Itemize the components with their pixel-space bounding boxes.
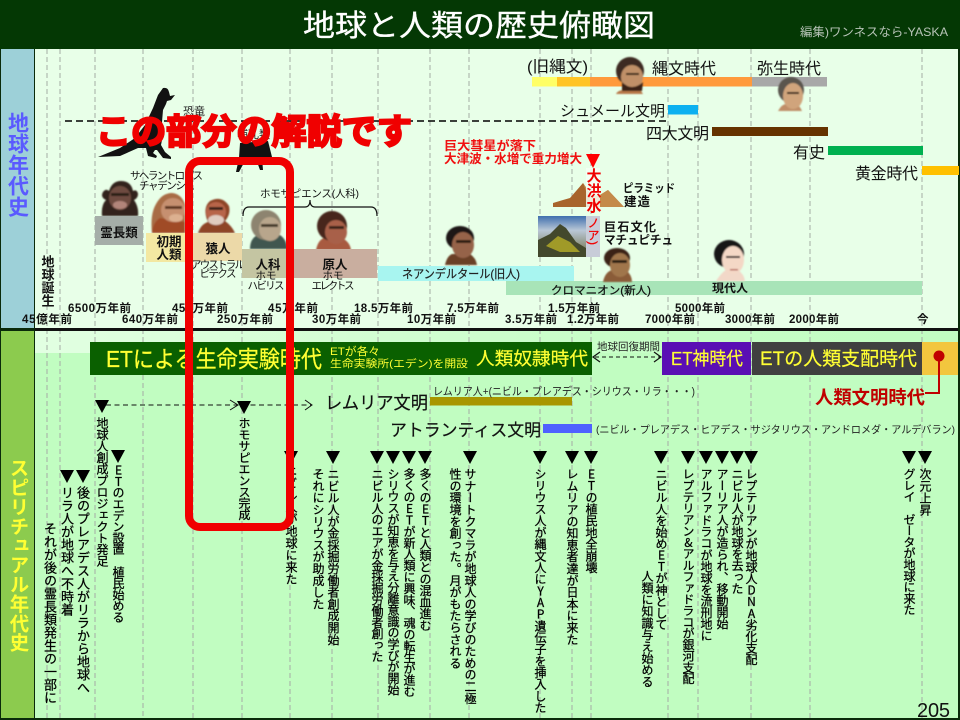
homo sapiens family label: ホモサピエンス(人科) <box>260 187 359 200</box>
event: Eden <box>110 450 127 622</box>
editor credit: 編集)ワンネスなら-YASKA <box>800 24 948 39</box>
text: ホモサピエンス完成 <box>236 417 253 520</box>
sidebar: spiritual age: スピリチュアル年代史 <box>6 458 29 652</box>
event: Sirius wisdom <box>385 451 402 696</box>
event: many ET interest <box>401 451 418 697</box>
lemuria label and bar: レムリア人+(ニビル・プレアデス・シリウス・リラ・・・) <box>433 384 695 398</box>
jomon labels <box>527 58 821 78</box>
recorded history label and bar: 有史 <box>793 144 825 162</box>
megalith label: 巨石文化 <box>604 219 656 234</box>
megalith label <box>604 219 673 247</box>
box: ape-man: アウストラル <box>191 259 245 271</box>
portrait: jomon man <box>616 57 644 94</box>
panel: spiritual age background <box>35 331 958 718</box>
portrait: early hominid <box>152 193 185 233</box>
event: ET colonies collapse <box>583 451 600 574</box>
jomon labels: 弥生時代 <box>757 60 821 78</box>
box: ape-man <box>191 233 245 280</box>
jomon labels: (旧縄文) <box>527 58 588 76</box>
event: earth human project <box>94 400 111 567</box>
text: それにシリウスが助成した <box>310 468 327 610</box>
era band: ET life experiment and slavery: 生命実験所(エデン)を開設 <box>330 357 469 370</box>
cro-magnon bar <box>506 281 922 297</box>
event: Aryans <box>714 451 731 630</box>
box: early hominids <box>146 233 193 262</box>
year labels: 30万年前 <box>312 312 361 326</box>
text: ニビル人のエアが金採掘労働者創った <box>369 468 386 662</box>
event: Nibiru arrive <box>283 451 300 585</box>
event: Grey Zeta <box>901 451 918 615</box>
event: Enki creates workers <box>369 451 386 662</box>
text: シリウスが知恵を与え分離意識の学びが開始 <box>385 468 402 695</box>
year labels: 今 <box>917 312 929 326</box>
year labels <box>22 301 929 326</box>
sumer label and bar: シュメール文明 <box>560 103 665 120</box>
box: homo erectus: エレクトス <box>312 280 354 292</box>
event: homo sapiens complete <box>236 401 253 520</box>
atlantis label and bar: アトランティス文明 <box>390 421 541 440</box>
recovery period arrow: 地球回復期間 <box>597 340 660 353</box>
portrait: homo erectus <box>316 211 351 250</box>
text: レプテリアンが地球人DNA劣化支配 <box>743 468 760 665</box>
icon: dinosaur silhouette <box>98 88 175 159</box>
year labels: 250万年前 <box>217 312 273 326</box>
comet note: 巨大彗星が落下 <box>444 138 536 153</box>
sidebar: spiritual age <box>1 331 34 718</box>
megalith label: マチュピチュ <box>604 233 673 247</box>
era band: ET life experiment and slavery <box>90 342 592 375</box>
pyramid label: 建造 <box>624 194 650 209</box>
brace: homo sapiens <box>243 200 377 216</box>
text: ETのエデン設置 植民始める <box>110 464 127 622</box>
era band: ET life experiment and slavery: 人類奴隷時代 <box>476 349 588 369</box>
sidebar: earth age: 地球年代史 <box>6 112 29 217</box>
year labels: 7.5万年前 <box>447 301 499 315</box>
year labels: 5000年前 <box>675 301 725 315</box>
birth of earth label: 地球誕生 <box>40 254 54 307</box>
lemuria label and bar: レムリア文明 <box>325 393 428 413</box>
year labels: 10万年前 <box>407 312 456 326</box>
portrait: chimp <box>102 181 138 216</box>
text: グレイ ゼータが地球に来た <box>901 468 918 615</box>
lemuria label and bar <box>325 384 695 413</box>
text: 地球人創成プロジェクト発足 <box>94 417 111 566</box>
text: リラ人が地球へ不時着 <box>58 486 77 616</box>
great flood marker: 大洪水 <box>584 167 602 213</box>
era band: human civilization marker <box>922 342 958 393</box>
year labels: 3000年前 <box>725 312 775 326</box>
era band: ET life experiment and slavery: ETによる生命実験時代 <box>106 346 322 372</box>
event: galaxy rule <box>680 451 697 684</box>
box: early hominids: 初期 <box>156 234 182 249</box>
mammal label: 哺乳類 <box>237 128 270 141</box>
title bar <box>0 0 960 49</box>
text: サナートクマラが地球人の学びのための二極 <box>462 468 479 704</box>
four civilizations label and bar: 四大文明 <box>646 125 709 143</box>
event: mixing <box>417 451 434 631</box>
year labels: 45万年前 <box>268 301 318 315</box>
human civilization label: 人類文明時代 <box>815 387 925 408</box>
year labels: 450万年前 <box>172 301 228 315</box>
year labels: 6500万年前 <box>68 301 131 315</box>
text: ETの植民地全崩壊 <box>583 468 600 573</box>
callout: highlight frame <box>189 161 290 527</box>
great flood marker: ノア) <box>586 217 600 245</box>
year labels: 18.5万年前 <box>354 301 413 315</box>
great flood marker <box>584 154 602 245</box>
text: それが後の霊長類発生の一部に <box>41 522 60 704</box>
panel: earth age background <box>35 49 958 328</box>
text: アーリア人が造られ、移動開始 <box>714 468 731 629</box>
era band: ET life experiment and slavery: ETが各々 <box>330 344 380 358</box>
portrait: cro-magnon <box>603 248 632 282</box>
image: pyramids <box>553 183 624 207</box>
text: 性の環境を創った。月がもたらされる <box>447 468 464 669</box>
event: Nibiru as gods <box>639 451 670 687</box>
era separator line <box>35 328 958 331</box>
text: ニビル人が地球を去った <box>729 468 746 594</box>
comet note: 大津波・水増で重力増大 <box>444 151 582 166</box>
event: Lemurian sages <box>564 451 581 645</box>
primate labels: チャデンシス <box>139 179 195 192</box>
era band: ET rule over humans <box>752 342 922 375</box>
portrait: modern human <box>714 240 745 281</box>
year labels: 2000年前 <box>789 312 839 326</box>
text: シリウス人が縄文人にYAP遺伝子を挿入した <box>532 468 549 713</box>
box: homo erectus: ホモ <box>322 270 344 282</box>
text: レプテリアン&アルファドラコが銀河支配 <box>680 468 697 684</box>
text: 多くのETが新人類に興味、魂の転生が進む <box>401 468 418 697</box>
event: Alpha Draco exile <box>698 451 715 641</box>
text: 多くのETと人類との混血進む <box>417 468 434 631</box>
box: homo erectus: 原人 <box>322 258 348 272</box>
event: Nibiru leave <box>729 451 746 594</box>
portrait: neanderthal <box>445 226 477 265</box>
text: アルファドラコが地球を流刑地に <box>698 468 715 641</box>
text: 後のプレアデス人がリラから地球へ <box>74 486 93 694</box>
text: 次元上昇 <box>917 468 934 516</box>
box: primates: 霊長類 <box>100 226 138 240</box>
callout: headline: この部分の解説です <box>96 104 412 155</box>
portrait: homo habilis <box>250 210 287 249</box>
primate labels: サヘラントロプス <box>130 170 203 182</box>
jomon labels: 縄文時代 <box>652 60 716 78</box>
box: homo erectus <box>292 249 377 292</box>
year labels: 3.5万年前 <box>505 312 557 326</box>
box: homo habilis: 人科 <box>255 257 281 272</box>
year labels: 640万年前 <box>122 312 178 326</box>
golden age label and bar <box>855 165 959 183</box>
box: homo habilis <box>242 249 292 292</box>
atlantis label and bar: (ニビル・プレアデス・ヒアデス・サジタリウス・アンドロメダ・アルデバラン) <box>596 423 955 436</box>
text: ニビル人が金採掘労働者創成開始 <box>325 468 342 645</box>
box: homo habilis: ホモ <box>256 270 276 282</box>
box: early hominids: 人類 <box>156 248 182 262</box>
title bar: 地球と人類の歴史俯瞰図 <box>303 10 655 43</box>
year labels: 7000年前 <box>645 312 695 326</box>
era band: ET rule over humans: ETの人類支配時代 <box>760 348 917 370</box>
year labels: 1.5万年前 <box>548 301 600 315</box>
dinosaur era dashed line <box>65 120 668 122</box>
dinosaur label: 恐竜 <box>183 105 205 118</box>
image: machu picchu <box>538 216 600 257</box>
event: Sanat Kumara <box>447 451 479 704</box>
box: primates <box>95 216 143 245</box>
sidebar: earth age <box>1 49 34 328</box>
text: レムリアの知恵者達が日本に来た <box>564 468 581 645</box>
portrait: yayoi man <box>778 77 804 111</box>
neanderthal bar: ネアンデルタール(旧人) <box>402 266 520 281</box>
text: ニビル人を始めETが神として <box>653 468 670 630</box>
portrait: australopithecus <box>198 199 235 233</box>
atlantis label and bar <box>390 421 955 440</box>
cro-magnon bar: 現代人 <box>712 282 749 295</box>
primate labels <box>130 170 203 192</box>
event: ascension <box>917 451 934 516</box>
recovery period arrow <box>593 340 661 362</box>
icon: mammal silhouette <box>236 141 272 172</box>
golden age label and bar: 黄金時代 <box>855 165 918 183</box>
event: Pleiadeans <box>74 470 93 694</box>
timeline bar: jomon and yayoi <box>532 77 827 86</box>
event: Lyra people <box>41 470 77 704</box>
text: ニビル人が地球に来た <box>283 465 300 585</box>
neanderthal bar <box>378 266 574 281</box>
four civilizations label and bar <box>646 125 828 143</box>
recorded history label and bar <box>793 144 923 162</box>
pyramid label <box>623 182 675 209</box>
box: ape-man: ピテクス <box>200 268 236 280</box>
era band: ET god age <box>662 342 751 375</box>
event: gold mining workers <box>310 451 342 646</box>
cro-magnon bar: クロマニオン(新人) <box>551 284 651 297</box>
box: homo habilis: ハビリス <box>248 280 284 292</box>
comet note <box>444 138 582 166</box>
year labels: 1.2万年前 <box>567 312 619 326</box>
box: ape-man: 猿人 <box>205 241 231 256</box>
event: Reptilian DNA <box>743 451 760 666</box>
text: 人類に知識与え始める <box>639 570 656 687</box>
year labels: 45億年前 <box>22 312 72 326</box>
event: YAP gene <box>532 451 549 713</box>
lemuria dashed arrow <box>106 400 312 410</box>
era band: ET god age: ET神時代 <box>671 349 743 369</box>
pyramid label: ピラミッド <box>623 182 675 195</box>
